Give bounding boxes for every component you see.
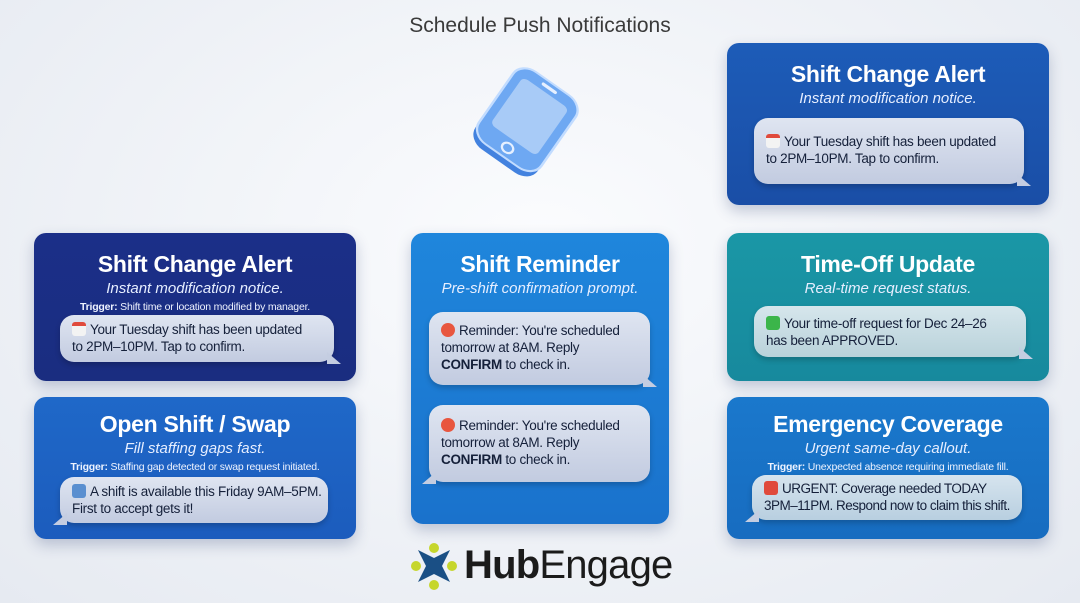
panel: shift reminder (411, 233, 669, 524)
bubble: to 2PM–10PM. Tap to confirm. (766, 151, 939, 166)
panel: shift change alert top-right (727, 43, 1049, 205)
bubble: Your Tuesday shift has been updated (90, 322, 302, 337)
panel: time-off update (727, 233, 1049, 381)
panel: open shift swap: Open Shift / Swap (100, 411, 290, 437)
panel: emergency coverage: Trigger: Unexpected absence requiring immediate fill. (768, 461, 1008, 473)
bubble (754, 306, 1026, 357)
bubble: has been APPROVED. (766, 333, 898, 348)
bubble: 3PM–11PM. Respond now to claim this shift. (764, 498, 1010, 513)
bubble: First to accept gets it! (72, 501, 193, 516)
title: Schedule Push Notifications (409, 14, 671, 37)
panel: shift change alert left: Trigger: Shift time or location modified by manager. (80, 301, 310, 313)
bubble (60, 477, 328, 523)
panel: shift change alert left: Shift Change Alert (98, 251, 292, 277)
bubble (752, 475, 1022, 520)
bubble (60, 315, 334, 362)
panel: shift change alert left: Instant modification notice. (106, 280, 284, 297)
panel: shift change alert top-right: Shift Change Alert (791, 61, 985, 87)
panel: open shift swap (34, 397, 356, 539)
bubble 1 (429, 312, 650, 385)
bubble: to 2PM–10PM. Tap to confirm. (72, 339, 245, 354)
bubble 2: CONFIRM to check in. (441, 452, 570, 467)
panel: time-off update: Time-Off Update (801, 251, 975, 277)
bubble 2 (429, 405, 650, 482)
bubble (754, 118, 1024, 184)
bubble 2: Reminder: You're scheduled (459, 418, 620, 433)
panel: open shift swap: Trigger: Staffing gap detected or swap request initiated. (70, 461, 320, 473)
bubble: Your Tuesday shift has been updated (784, 134, 996, 149)
panel: shift change alert top-right: Instant modification notice. (799, 90, 977, 107)
bubble 1: Reminder: You're scheduled (459, 323, 620, 338)
panel: shift reminder: Shift Reminder (460, 251, 620, 277)
bubble: A shift is available this Friday 9AM–5PM. (90, 484, 322, 499)
bubble: Your time-off request for Dec 24–26 (784, 316, 987, 331)
panel: open shift swap: Fill staffing gaps fast. (125, 440, 265, 457)
panel: shift change alert left (34, 233, 356, 381)
bubble 2: tomorrow at 8AM. Reply (441, 435, 579, 450)
panel: time-off update: Real-time request status. (805, 280, 971, 297)
icon: glass phone (473, 67, 579, 176)
bubble 1: tomorrow at 8AM. Reply (441, 340, 579, 355)
wordmark: HubEngage (464, 543, 672, 587)
panel: shift reminder: Pre-shift confirmation prompt. (442, 280, 638, 297)
icon: logo mark (411, 543, 457, 590)
logo: HubEngage (411, 543, 672, 590)
panel: emergency coverage (727, 397, 1049, 539)
panel: emergency coverage: Emergency Coverage (773, 411, 1003, 437)
panel: emergency coverage: Urgent same-day callout. (805, 440, 971, 457)
bubble 1: CONFIRM to check in. (441, 357, 570, 372)
bubble: URGENT: Coverage needed TODAY (782, 481, 987, 496)
